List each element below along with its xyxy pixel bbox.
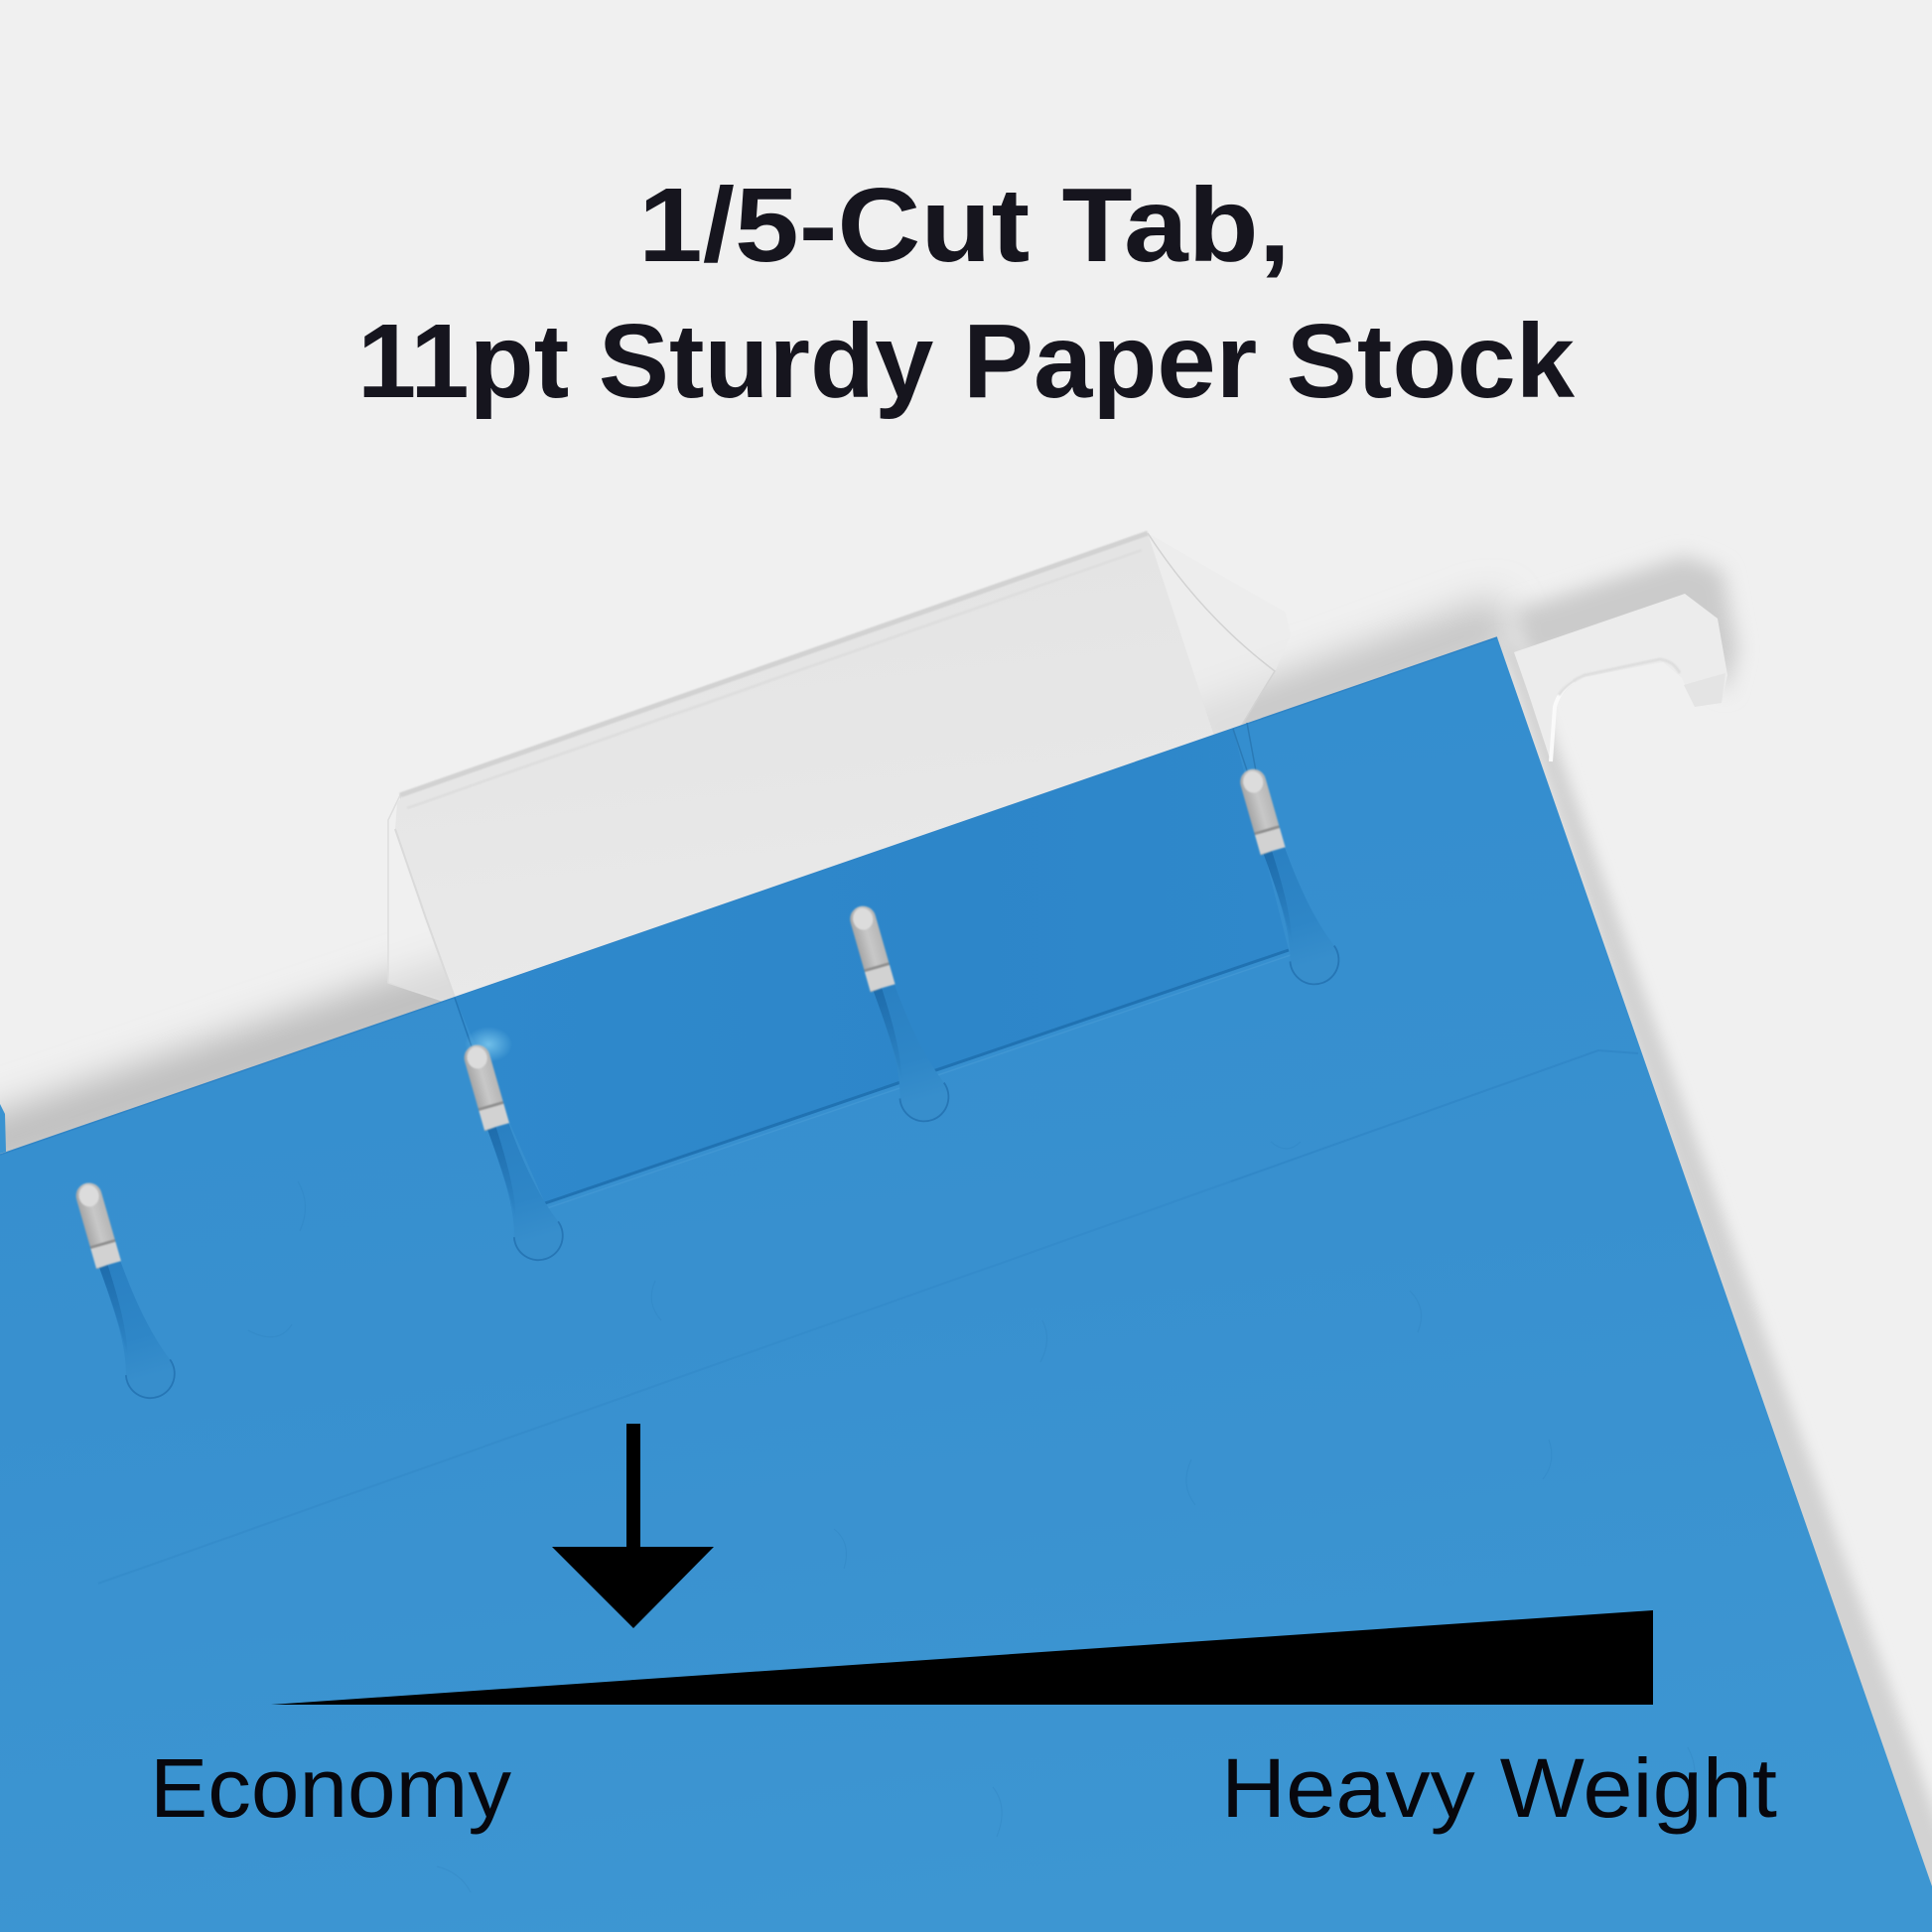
clear plastic tab	[388, 533, 1291, 1005]
blue sliver of folder behind, left edge	[0, 1104, 6, 1154]
title: 11pt Sturdy Paper Stock	[357, 303, 1576, 420]
title	[357, 167, 1576, 420]
tab flange right	[1148, 533, 1291, 740]
title: 1/5-Cut Tab,	[638, 167, 1291, 284]
paper fibres	[248, 1142, 1695, 1892]
icon: down arrow marker	[552, 1424, 714, 1628]
label: Economy: Economy	[150, 1741, 511, 1835]
tab flange left	[388, 795, 467, 1005]
slot with metal clip, second	[460, 1036, 569, 1266]
slot with metal clip, far left	[71, 1174, 181, 1404]
glow highlight on tab	[465, 1027, 512, 1062]
fold line	[1231, 1050, 1638, 1181]
tab seen through folder	[455, 723, 1291, 1208]
label: Heavy Weight: Heavy Weight	[1221, 1741, 1777, 1835]
slot with metal clip, third	[846, 897, 954, 1127]
folder shadows	[0, 556, 1932, 1932]
slot with metal clip, fourth	[1236, 760, 1344, 990]
weight scale wedge	[271, 1610, 1653, 1705]
blue hanging folder	[0, 637, 1932, 1932]
plastic hanger hook	[1514, 594, 1727, 761]
tab body	[395, 533, 1214, 998]
